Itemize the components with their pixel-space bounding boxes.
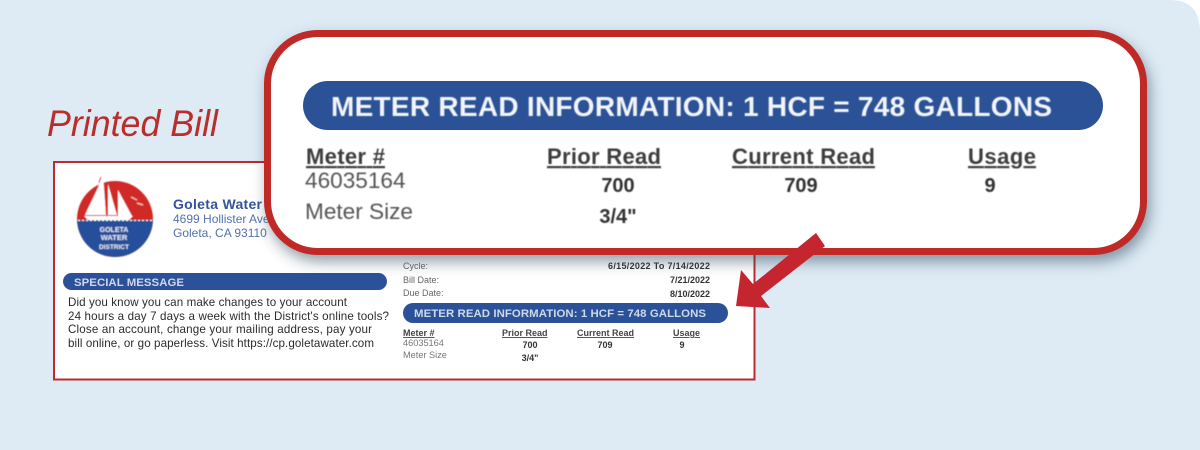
billing dates: 8/10/2022 bbox=[670, 289, 710, 299]
special message bar: SPECIAL MESSAGE bbox=[74, 277, 184, 289]
small meter table: Meter # bbox=[403, 328, 435, 338]
district address: Goleta Water bbox=[173, 196, 263, 212]
small meter table: Prior Read bbox=[502, 328, 548, 338]
arrow bbox=[736, 233, 825, 308]
small meter table: 3/4" bbox=[522, 353, 538, 363]
meter read table: 9 bbox=[984, 175, 996, 197]
meter read table: Meter Size bbox=[305, 199, 413, 224]
billing dates: Cycle: bbox=[403, 261, 428, 271]
small meter read bar bbox=[403, 303, 728, 323]
small meter table bbox=[403, 328, 700, 363]
heading: Printed Bill: Printed Bill bbox=[47, 103, 220, 144]
meter read table: 3/4" bbox=[599, 206, 637, 228]
icon: district logo: WATER bbox=[101, 233, 128, 242]
meter read table: Meter # bbox=[306, 144, 385, 169]
small meter table: 46035164 bbox=[403, 338, 444, 348]
special message text: bill online, or go paperless. Visit https://cp.goletawater.com bbox=[68, 337, 374, 350]
billing dates: 6/15/2022 To 7/14/2022 bbox=[608, 261, 710, 271]
billing dates: Bill Date: bbox=[403, 275, 439, 285]
meter read table bbox=[305, 144, 1036, 228]
small meter read bar: METER READ INFORMATION: 1 HCF = 748 GALLONS bbox=[414, 308, 706, 320]
special message text: Did you know you can make changes to your account bbox=[68, 296, 348, 309]
icon: district logo: GOLETA bbox=[100, 227, 128, 234]
small meter table: Usage bbox=[673, 328, 700, 338]
icon: district logo bbox=[77, 174, 153, 258]
district address: Goleta, CA 93110 bbox=[173, 226, 267, 240]
small meter table: Meter Size bbox=[403, 350, 447, 360]
small meter table: Current Read bbox=[577, 328, 634, 338]
special message bar bbox=[63, 273, 387, 290]
meter read header bar: METER READ INFORMATION: 1 HCF = 748 GALLONS bbox=[331, 91, 1052, 122]
special message text: 24 hours a day 7 days a week with the District's online tools? bbox=[68, 310, 390, 323]
district address bbox=[173, 196, 270, 240]
meter read header bar bbox=[303, 81, 1103, 130]
meter read table: Prior Read bbox=[547, 144, 661, 169]
meter read table: 46035164 bbox=[305, 168, 406, 193]
billing dates: Due Date: bbox=[403, 288, 444, 298]
meter read table: Usage bbox=[968, 144, 1036, 169]
special message text: Close an account, change your mailing address, pay your bbox=[68, 323, 372, 336]
billing dates bbox=[403, 261, 710, 299]
special message text bbox=[68, 296, 390, 350]
icon: district logo: DISTRICT bbox=[99, 244, 129, 251]
meter read table: 700 bbox=[601, 175, 635, 197]
district address: 4699 Hollister Ave bbox=[173, 212, 270, 226]
billing dates: 7/21/2022 bbox=[670, 275, 710, 285]
small meter table: 700 bbox=[522, 340, 538, 350]
small meter table: 9 bbox=[679, 340, 685, 350]
meter read table: Current Read bbox=[732, 144, 875, 169]
meter read table: 709 bbox=[784, 175, 818, 197]
small meter table: 709 bbox=[597, 340, 613, 350]
callout: enlarged meter read information bbox=[268, 34, 1144, 252]
panel: printed bill bbox=[54, 162, 754, 380]
